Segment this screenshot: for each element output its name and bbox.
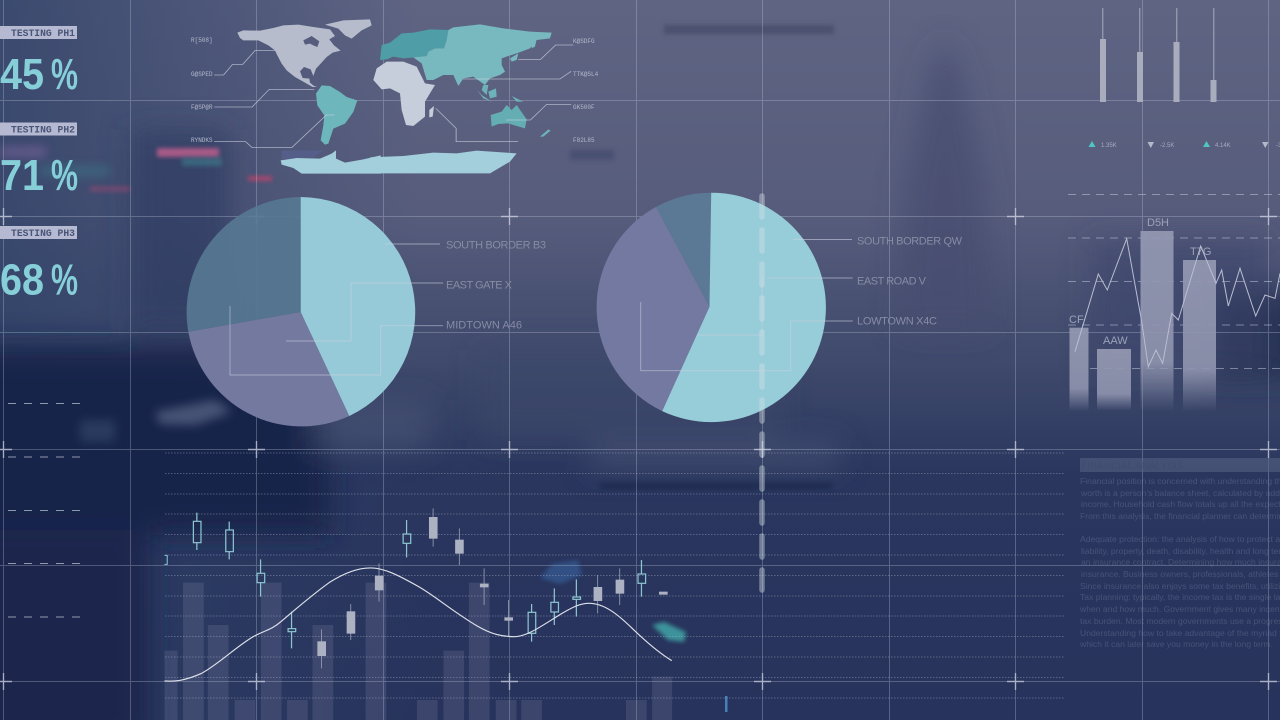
pie 2 labels: EAST ROAD V: [857, 276, 927, 288]
pie 2 labels: SOUTH BORDER QW: [857, 236, 963, 248]
slice: purple: [188, 312, 349, 426]
hudson bay: [303, 36, 319, 47]
stat: testing phase 1: 45: [0, 50, 44, 99]
bar labels: AAW: [1103, 335, 1128, 347]
right bar chart: [1068, 194, 1280, 412]
bar labels: CF: [1069, 314, 1084, 326]
financial analysis text block: [1079, 458, 1280, 649]
pie 2 leader lines: [641, 240, 853, 371]
stat: testing phase 2: 71: [0, 151, 44, 200]
stat: testing phase 1: TESTING PH1: [11, 28, 75, 39]
pie chart 2: [597, 193, 826, 422]
filled candles: [318, 508, 667, 668]
trend curve: [164, 568, 672, 681]
slice: dark: [187, 197, 301, 332]
stat: testing phase 2: TESTING PH2: [11, 124, 75, 136]
heading bar: [1080, 458, 1280, 472]
map labels: F@SP@R: [191, 104, 213, 111]
map labels: F82L85: [573, 137, 595, 144]
stat: testing phase 3: %: [51, 256, 78, 304]
pie 2 labels: [857, 236, 963, 328]
top right delta indicators: 1.35K: [1101, 143, 1117, 149]
pie 1 labels: [446, 240, 546, 332]
light streaks: blurred traffic lights: [0, 147, 728, 712]
bar labels: T7G: [1190, 246, 1211, 258]
land: asia: [413, 24, 552, 86]
stat: testing phase 1: [0, 26, 78, 99]
map labels: RYNDKS: [191, 137, 213, 144]
pie 2 labels: LOWTOWN X4C: [857, 316, 937, 328]
small bracket: [164, 555, 167, 564]
top right delta indicators: 4.14K: [1215, 143, 1231, 149]
candlestick chart: [164, 508, 667, 668]
land: greenland: [325, 19, 372, 39]
map leader lines: [214, 45, 573, 148]
land: africa: [373, 62, 435, 126]
world map: eurasia, africa and oceania: [370, 24, 552, 173]
map labels: [191, 37, 599, 144]
panel: testing phase stats: [0, 26, 78, 304]
pie 1 labels: MIDTOWN A46: [446, 320, 522, 332]
stat: testing phase 3: TESTING PH3: [11, 228, 75, 239]
land: europe: [380, 29, 448, 60]
paragraph lines: which it can later save you money in the long term.: [1079, 639, 1273, 649]
stat: testing phase 2: [0, 122, 78, 200]
map labels: GK500F: [573, 104, 595, 111]
map labels: G@SPED: [191, 71, 213, 78]
dashed vertical highlight: [759, 196, 765, 590]
top right delta indicators: -2.5K: [1160, 143, 1174, 149]
financial analysis text block: FINANCIAL ANALYSIS: [1081, 461, 1184, 472]
land: north america: [237, 25, 341, 87]
grid: cross markers: [0, 208, 1277, 690]
slice: light: [301, 197, 415, 416]
pie 1 labels: EAST GATE X: [446, 280, 513, 292]
land: south america: [316, 85, 357, 145]
land: kamchatka and japan: [510, 39, 537, 62]
pie chart 1: [187, 197, 415, 426]
top right delta indicators: [1088, 141, 1280, 149]
left dashed scale marks: [8, 404, 82, 617]
bar labels: [1069, 217, 1211, 347]
land: east antarctica: [370, 151, 517, 173]
zigzag line: [1075, 239, 1280, 367]
antarctic peninsula shadow: [282, 150, 323, 159]
stat: testing phase 1: %: [51, 50, 78, 99]
stat: testing phase 3: [0, 226, 78, 304]
slice: purple: [597, 207, 710, 411]
stat: testing phase 3: 68: [0, 256, 44, 304]
stat: testing phase 2: %: [51, 151, 78, 200]
world map: americas: [237, 19, 381, 174]
top right candles: [1100, 8, 1216, 102]
land: south-east asia: [477, 85, 523, 102]
slice: light: [662, 193, 826, 422]
bars: [1070, 231, 1216, 412]
pie 1 leader lines: [230, 244, 443, 375]
map labels: K@SDFG: [573, 38, 595, 45]
bottom chart: background bars: [164, 583, 672, 720]
land: west antarctica: [281, 150, 381, 174]
map labels: R[508]: [191, 37, 213, 44]
slice: dark: [656, 193, 711, 307]
bar labels: D5H: [1147, 217, 1169, 229]
land: madagascar: [429, 106, 434, 117]
bottom chart: dotted grid lines: [165, 453, 1065, 698]
paragraph lines: [1079, 476, 1280, 649]
land: australia: [491, 105, 527, 128]
map labels: TTK@SL4: [573, 71, 599, 78]
outlined candles: [193, 513, 646, 648]
dashed guide lines: [1068, 194, 1280, 368]
pie 1 labels: SOUTH BORDER B3: [446, 240, 546, 252]
land: new zealand: [540, 129, 551, 137]
